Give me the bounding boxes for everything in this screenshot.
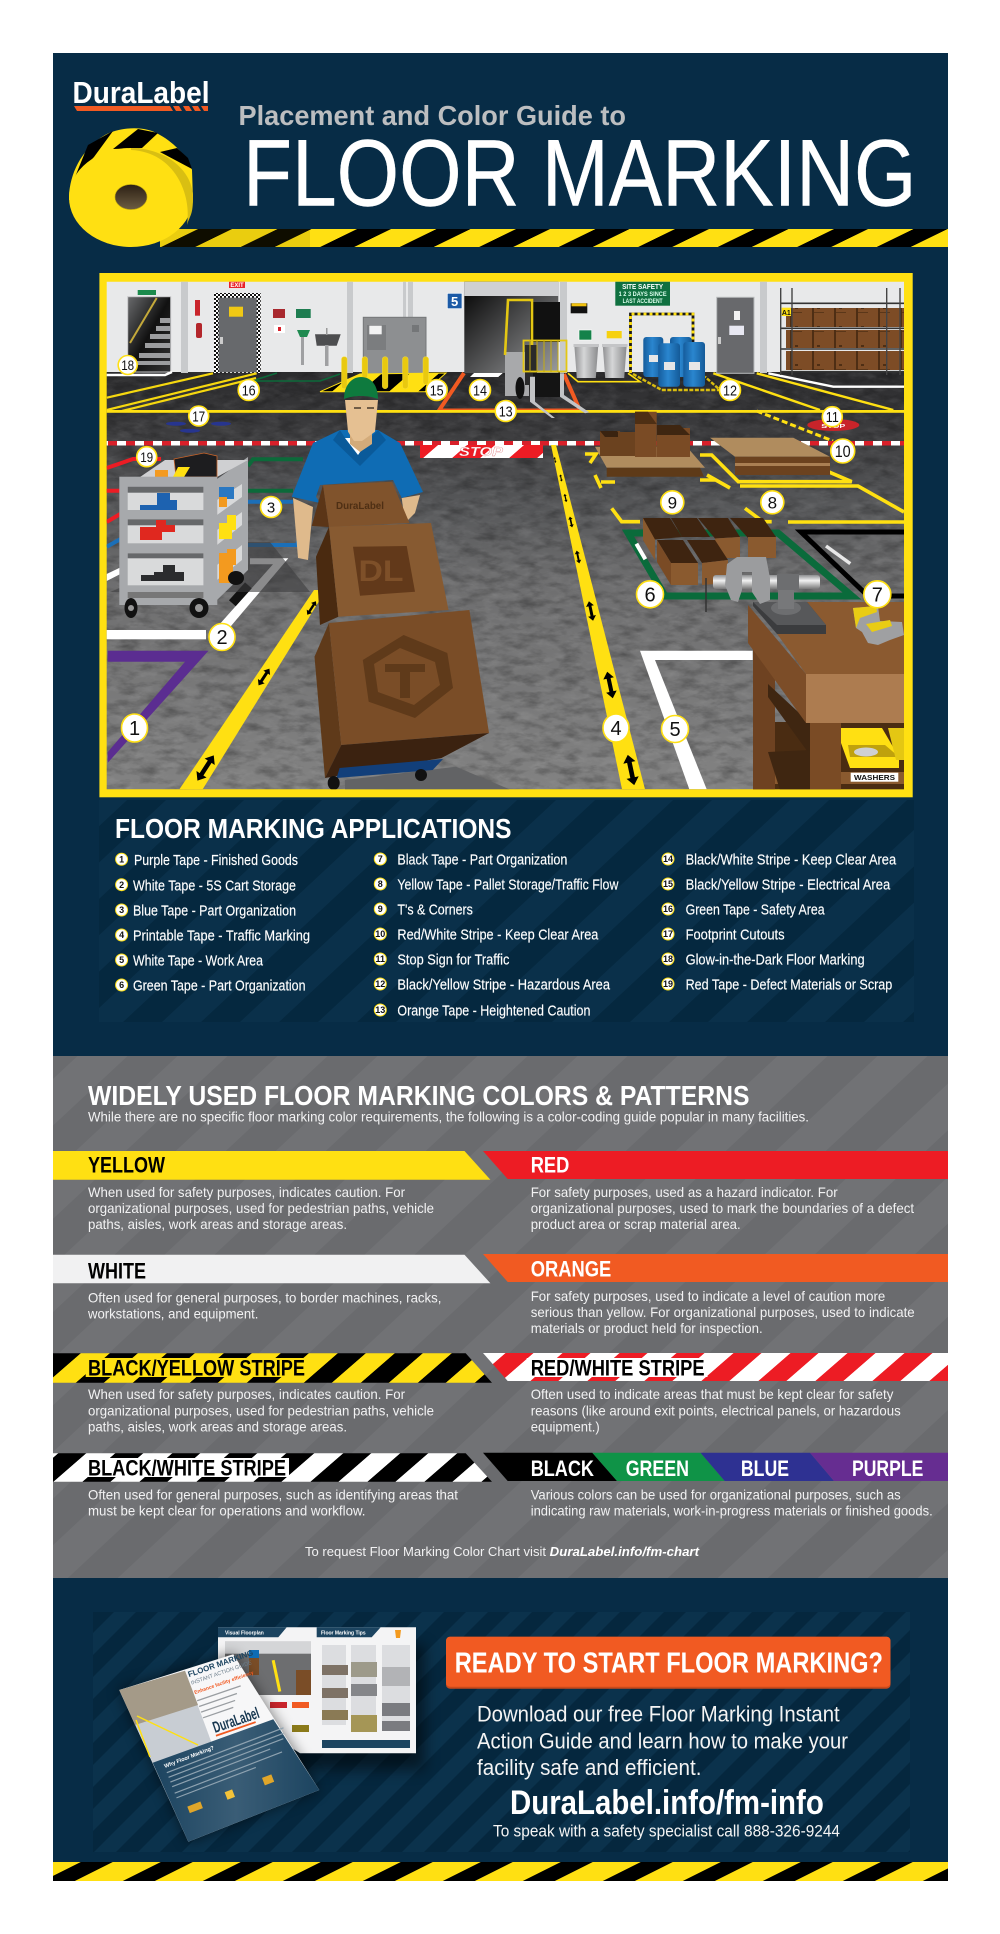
organizational colors entry: PURPLE [852, 1456, 923, 1481]
floor scene illustration [99, 273, 913, 797]
safety station signs, eyewash, sink [273, 309, 341, 366]
red and white stripe entry [483, 1353, 948, 1435]
marker 19: 19 [140, 449, 153, 465]
stop sign on floor: STOP [821, 424, 846, 430]
site safety sign: 1 2 3 DAYS SINCE [619, 292, 667, 298]
black and white keep clear [470, 373, 503, 377]
marker 7: 7 [872, 584, 883, 606]
marker 3: 3 [267, 500, 275, 516]
panel: floor marking applications [99, 800, 914, 1022]
legend column 2: T's & Corners [397, 902, 473, 918]
workbench [748, 602, 904, 790]
middle box: DL [358, 555, 404, 588]
site safety sign: SITE SAFETY [622, 282, 663, 291]
orange heightened caution tape [439, 373, 580, 410]
download text [477, 1702, 848, 1780]
black and white stripe entry [53, 1453, 492, 1519]
legend column 2: 9 [378, 904, 383, 914]
marker 6: 6 [644, 584, 656, 606]
marker 16: 16 [242, 384, 256, 400]
red and white stripe entry: reasons (like around exit points, electrical panels, or hazardous [531, 1404, 901, 1419]
legend column 1: Green Tape - Part Organization [133, 978, 306, 994]
orange entry: materials or product held for inspection. [531, 1321, 763, 1336]
organizational colors entry: indicating raw materials, work-in-progress materials or finished goods. [531, 1504, 933, 1519]
red and white stripe entry: Often used to indicate areas that must be kept clear for safety [531, 1387, 894, 1402]
marker 3 [260, 496, 282, 518]
brochure title: INSTANT ACTION GUIDE [190, 1660, 253, 1687]
marker 11 [822, 407, 842, 427]
white tape: cart storage [106, 558, 288, 639]
red entry: organizational purposes, used to mark the boundaries of a defect [531, 1201, 914, 1216]
legend column 2: Black/Yellow Stripe - Hazardous Area [397, 978, 611, 994]
legend column 3: Glow-in-the-Dark Floor Marking [686, 952, 865, 968]
organizational colors entry: GREEN [626, 1456, 689, 1481]
roll-up door [464, 281, 558, 373]
stop marking [420, 445, 543, 458]
black and yellow stripe entry: When used for safety purposes, indicates caution. For [88, 1387, 405, 1402]
green safety tape [255, 373, 340, 381]
legend column 1: Printable Tape - Traffic Marking [133, 928, 310, 944]
hand truck shadow [345, 767, 511, 790]
legend column 3: 15 [663, 879, 673, 889]
red entry [483, 1151, 948, 1232]
legend column 2: 8 [378, 879, 383, 889]
black and yellow stripe entry: BLACK/YELLOW STRIPE [88, 1356, 305, 1381]
top box [312, 482, 410, 527]
marker 12: 12 [723, 384, 737, 400]
marker 1: 1 [129, 718, 140, 740]
color chart request note [305, 1544, 700, 1559]
footprint cutouts [166, 422, 231, 433]
download text: Download our free Floor Marking Instant [477, 1702, 840, 1727]
marker 15 [426, 380, 447, 400]
logo: DuraLabel: DuraLabel [72, 75, 210, 110]
button: ready to start: READY TO START FLOOR MARKING? [455, 1647, 883, 1679]
purple tape [108, 651, 208, 763]
vise [706, 557, 826, 634]
legend column 1: 3 [119, 905, 124, 915]
red and white stripe entry: equipment.) [531, 1420, 600, 1435]
legend column 2: Stop Sign for Traffic [397, 952, 509, 968]
marker 19 [137, 447, 157, 467]
legend column 3: Red Tape - Defect Materials or Scrap [686, 978, 892, 994]
wall pillars and pipes [181, 281, 767, 373]
marker 1 [122, 714, 148, 742]
legend column 1: 4 [119, 930, 124, 940]
legend column 2: Black Tape - Part Organization [397, 852, 567, 868]
marker 2: 2 [216, 627, 228, 649]
legend column 3: Green Tape - Safety Area [686, 902, 825, 918]
brochure: open spread [218, 1627, 425, 1770]
thermal label printer [155, 453, 217, 477]
icon: hazard tape roll [69, 128, 193, 247]
stop marking: STOP [459, 444, 503, 459]
storage racks [780, 288, 906, 375]
white entry: WHITE [88, 1258, 146, 1283]
marker 5: 5 [669, 719, 681, 741]
marker 2 [209, 624, 235, 650]
marker 14 [470, 380, 490, 400]
brochure back text: Why Floor Marking? [164, 1745, 216, 1770]
washers bin and label: WASHERS [854, 773, 895, 782]
legend column 3: 18 [663, 954, 673, 964]
download text: facility safe and efficient. [477, 1755, 702, 1780]
forklift [505, 300, 589, 418]
yellow pallet and traffic lines [585, 454, 904, 522]
electrical panel [363, 317, 426, 374]
legend column 1: 1 [119, 854, 124, 864]
legend column 2: Orange Tape - Heightened Caution [397, 1004, 590, 1020]
dolly base and wheels [337, 759, 443, 778]
marker 16 [238, 380, 259, 400]
numbered markers [118, 356, 891, 742]
intro text: While there are no specific floor marking color requirements, the following is a color-coding guide popular in many facilities. [88, 1109, 809, 1125]
brochure title: Enhance facility efficiency [194, 1670, 255, 1696]
phone line: To speak with a safety specialist call 888-326-9244 [493, 1823, 840, 1841]
storage racks: A1 [782, 310, 791, 317]
pallets with boxes [595, 412, 830, 477]
red and white stripe entry: RED/WHITE STRIPE [531, 1356, 705, 1381]
legend column 2 [374, 852, 619, 1020]
marker 4 [603, 714, 629, 742]
marker 6 [636, 581, 664, 608]
black and white stripe entry: BLACK/WHITE STRIPE [88, 1456, 286, 1481]
legend column 2: Red/White Stripe - Keep Clear Area [397, 928, 599, 944]
legend column 2: 11 [376, 954, 385, 964]
black part organization tape [801, 532, 904, 596]
dock number sign: 5 [451, 294, 458, 309]
bottom hazard stripe [53, 1862, 948, 1881]
marker 13: 13 [499, 404, 513, 420]
legend column 1: Blue Tape - Part Organization [133, 904, 296, 920]
right door [717, 297, 754, 373]
download text: Action Guide and learn how to make your [477, 1728, 848, 1753]
fire safety signs [195, 300, 202, 338]
marker 7 [864, 581, 891, 608]
heading: WIDELY USED FLOOR MARKING COLORS & PATTERNS [88, 1080, 750, 1111]
heading: FLOOR MARKING APPLICATIONS [115, 813, 512, 844]
brochure title: FLOOR MARKING [187, 1648, 254, 1679]
black and yellow electrical area [320, 373, 446, 392]
organizational colors entry [483, 1453, 948, 1519]
marker 9 [661, 491, 684, 514]
color chart request note: DuraLabel.info/fm-chart [550, 1544, 700, 1559]
brochure back text [164, 1719, 300, 1817]
panel: call to action [53, 1578, 948, 1881]
orange entry [483, 1254, 948, 1336]
floor [106, 372, 906, 790]
hand truck with boxes [312, 482, 489, 790]
worker [292, 377, 423, 560]
organizational colors entry: Various colors can be used for organizational purposes, such as [531, 1487, 901, 1502]
middle box [316, 523, 448, 625]
green part organization tape [628, 533, 852, 596]
legend column 2: 7 [378, 854, 383, 864]
legend column 3: 16 [663, 904, 673, 914]
black and yellow stripe entry: paths, aisles, work areas and storage areas. [88, 1420, 347, 1435]
yellow entry: paths, aisles, work areas and storage areas. [88, 1217, 347, 1232]
left aisle yellow floor lines [107, 373, 257, 411]
right yellow floor lines [713, 373, 893, 410]
yellow entry: When used for safety purposes, indicates caution. For [88, 1185, 405, 1200]
boxes on green area [643, 518, 776, 585]
marker 4: 4 [610, 718, 622, 740]
brochure logo [211, 1705, 262, 1737]
stop sign on floor [807, 419, 859, 431]
orange entry: ORANGE [531, 1257, 611, 1282]
button: ready to start [446, 1637, 890, 1689]
brochure: front cover [119, 1648, 319, 1842]
supply cart [110, 453, 310, 618]
marker 17 [189, 406, 209, 426]
legend column 3: 19 [663, 979, 673, 989]
legend column 1 [116, 853, 310, 994]
marker 15: 15 [430, 384, 444, 400]
hazardous area box and drums [630, 314, 720, 390]
white work area tape [640, 651, 753, 789]
marker 10 [831, 439, 855, 463]
tape rolls on shelves [140, 487, 236, 583]
hazard stripe tape [160, 229, 948, 247]
marker 8: 8 [768, 493, 777, 512]
white entry: Often used for general purposes, to border machines, racks, [88, 1291, 442, 1306]
brochure title [187, 1648, 268, 1718]
legend column 1: White Tape - Work Area [133, 954, 264, 970]
wall signs right [571, 303, 622, 340]
legend column 2: 12 [375, 979, 385, 989]
yellow entry [53, 1151, 490, 1232]
organizational colors entry: BLUE [741, 1456, 789, 1481]
marker 9: 9 [668, 493, 677, 512]
red entry: RED [531, 1153, 569, 1178]
black and yellow stripe entry: organizational purposes, used for pedestrian paths, vehicle [88, 1404, 434, 1419]
wall [106, 281, 906, 373]
legend column 1: White Tape - 5S Cart Storage [133, 878, 296, 894]
white entry: workstations, and equipment. [87, 1307, 258, 1322]
yellow frame [99, 273, 913, 797]
bollards [342, 357, 429, 389]
door with exit sign [214, 281, 261, 373]
legend column 1: 6 [119, 980, 124, 990]
marker 8 [761, 491, 784, 514]
stairwell [106, 290, 172, 375]
red entry: For safety purposes, used as a hazard indicator. For [531, 1185, 838, 1200]
legend column 3: Black/White Stripe - Keep Clear Area [686, 852, 897, 868]
washers bin and label [841, 728, 904, 782]
orange entry: For safety purposes, used to indicate a level of caution more [531, 1289, 885, 1304]
yellow entry: organizational purposes, used for pedestrian paths, vehicle [88, 1201, 434, 1216]
red and white keep clear stripe [106, 441, 906, 446]
panel: navy background [53, 53, 948, 1057]
marker 13 [495, 400, 516, 422]
legend column 1: 2 [119, 880, 124, 890]
legend column 3: Black/Yellow Stripe - Electrical Area [686, 878, 891, 894]
site safety sign: LAST ACCIDENT [623, 299, 663, 305]
orange entry: serious than yellow. For organizational purposes, used to indicate [531, 1305, 915, 1320]
brochure: open spread: Visual Floorplan [225, 1630, 264, 1636]
marker 17: 17 [192, 410, 205, 426]
subtitle: Placement and Color Guide to [238, 100, 626, 131]
header [69, 75, 948, 247]
panel: colors and patterns [53, 1056, 948, 1578]
legend column 2: 13 [375, 1005, 385, 1015]
organizational colors entry: BLACK [531, 1456, 594, 1481]
legend column 1: 5 [119, 955, 124, 965]
gloves [853, 606, 904, 645]
top box: DuraLabel [336, 501, 384, 512]
marker 11: 11 [826, 410, 839, 426]
color chart request note: To request Floor Marking Color Chart visit [305, 1544, 546, 1559]
white entry [53, 1255, 490, 1322]
marker 18: 18 [121, 358, 134, 373]
legend column 1: Purple Tape - Finished Goods [134, 853, 298, 869]
legend column 3 [662, 852, 897, 994]
legend column 2: 10 [375, 929, 385, 939]
legend column 3: Footprint Cutouts [686, 928, 785, 944]
site safety sign [615, 280, 670, 306]
yellow entry: YELLOW [88, 1153, 165, 1178]
legend column 2: Yellow Tape - Pallet Storage/Traffic Flow [397, 878, 619, 894]
marker 12 [720, 380, 740, 400]
dock number sign [447, 293, 462, 309]
black and white stripe entry: must be kept clear for operations and workflow. [88, 1504, 366, 1519]
brochure: open spread: Floor Marking Tips [321, 1630, 366, 1636]
printable yellow traffic tape with arrows [551, 445, 645, 789]
website link: DuraLabel.info/fm-info [510, 1784, 824, 1822]
large box [314, 610, 489, 778]
marker 10: 10 [835, 443, 851, 461]
brochure logo: DuraLabel [211, 1705, 262, 1737]
marker 14: 14 [473, 384, 487, 400]
marker 18 [118, 356, 137, 374]
colored tape lines behind cart [106, 459, 303, 547]
trash cans [568, 344, 640, 382]
red entry: product area or scrap material area. [531, 1217, 741, 1232]
legend column 3: 14 [663, 854, 673, 864]
legend column 3: 17 [663, 929, 673, 939]
marker 5 [662, 716, 688, 742]
left yellow traffic tape [179, 590, 326, 789]
main yellow line [106, 410, 906, 413]
black and yellow stripe entry [53, 1353, 492, 1435]
door with exit sign: EXIT [230, 283, 244, 289]
black and white stripe entry: Often used for general purposes, such as identifying areas that [88, 1487, 458, 1502]
